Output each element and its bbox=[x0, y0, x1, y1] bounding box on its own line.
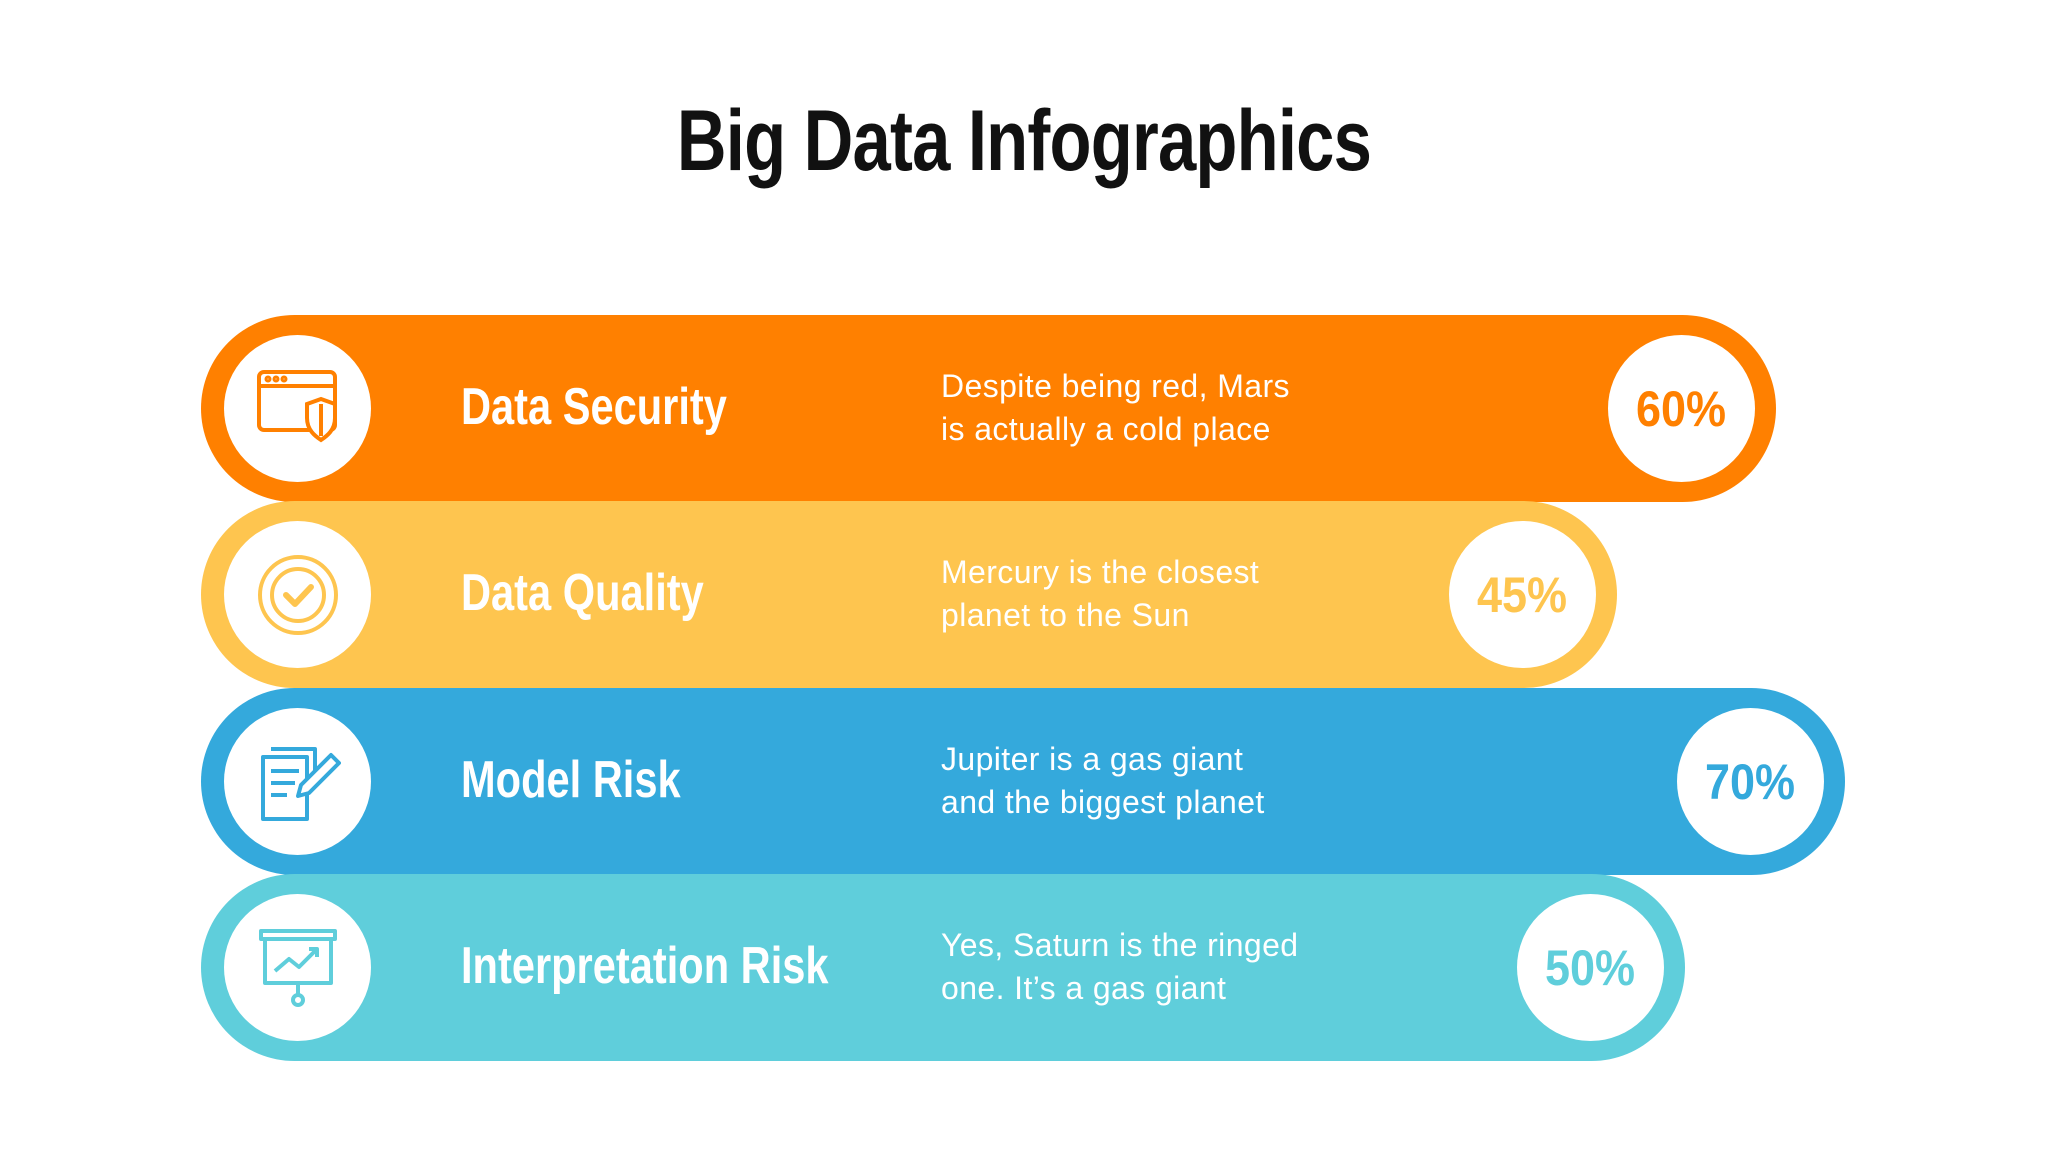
percentage: 60% bbox=[1636, 380, 1727, 436]
description: is actually a cold place bbox=[941, 411, 1271, 447]
description: planet to the Sun bbox=[941, 597, 1190, 633]
icon: document pen bbox=[224, 708, 371, 855]
description: one. It’s a gas giant bbox=[941, 970, 1226, 1006]
icon: check circle bbox=[224, 521, 371, 668]
percentage: 70% bbox=[1705, 754, 1796, 810]
bar: model risk bbox=[201, 688, 1845, 875]
description bbox=[941, 741, 1265, 820]
description: Yes, Saturn is the ringed bbox=[941, 927, 1298, 963]
description: Despite being red, Mars bbox=[941, 368, 1290, 404]
icon: presentation chart bbox=[224, 894, 371, 1041]
description bbox=[941, 368, 1290, 447]
description: Mercury is the closest bbox=[941, 554, 1259, 590]
description bbox=[941, 554, 1259, 633]
heading: Interpretation Risk bbox=[461, 937, 829, 995]
bar: data security bbox=[201, 315, 1776, 502]
percentage bbox=[1677, 708, 1824, 855]
description: and the biggest planet bbox=[941, 784, 1265, 820]
bar: interpretation risk bbox=[201, 874, 1685, 1061]
title: Big Data Infographics bbox=[677, 93, 1371, 189]
description: Jupiter is a gas giant bbox=[941, 741, 1243, 777]
percentage: 50% bbox=[1545, 940, 1636, 996]
percentage: 45% bbox=[1477, 566, 1568, 622]
heading: Data Security bbox=[461, 378, 727, 436]
icon: browser shield bbox=[224, 335, 371, 482]
description bbox=[941, 927, 1298, 1006]
percentage bbox=[1517, 894, 1664, 1041]
percentage bbox=[1608, 335, 1755, 482]
bar: data quality bbox=[201, 501, 1617, 688]
percentage bbox=[1449, 521, 1596, 668]
heading: Model Risk bbox=[461, 751, 681, 809]
heading: Data Quality bbox=[461, 564, 704, 622]
